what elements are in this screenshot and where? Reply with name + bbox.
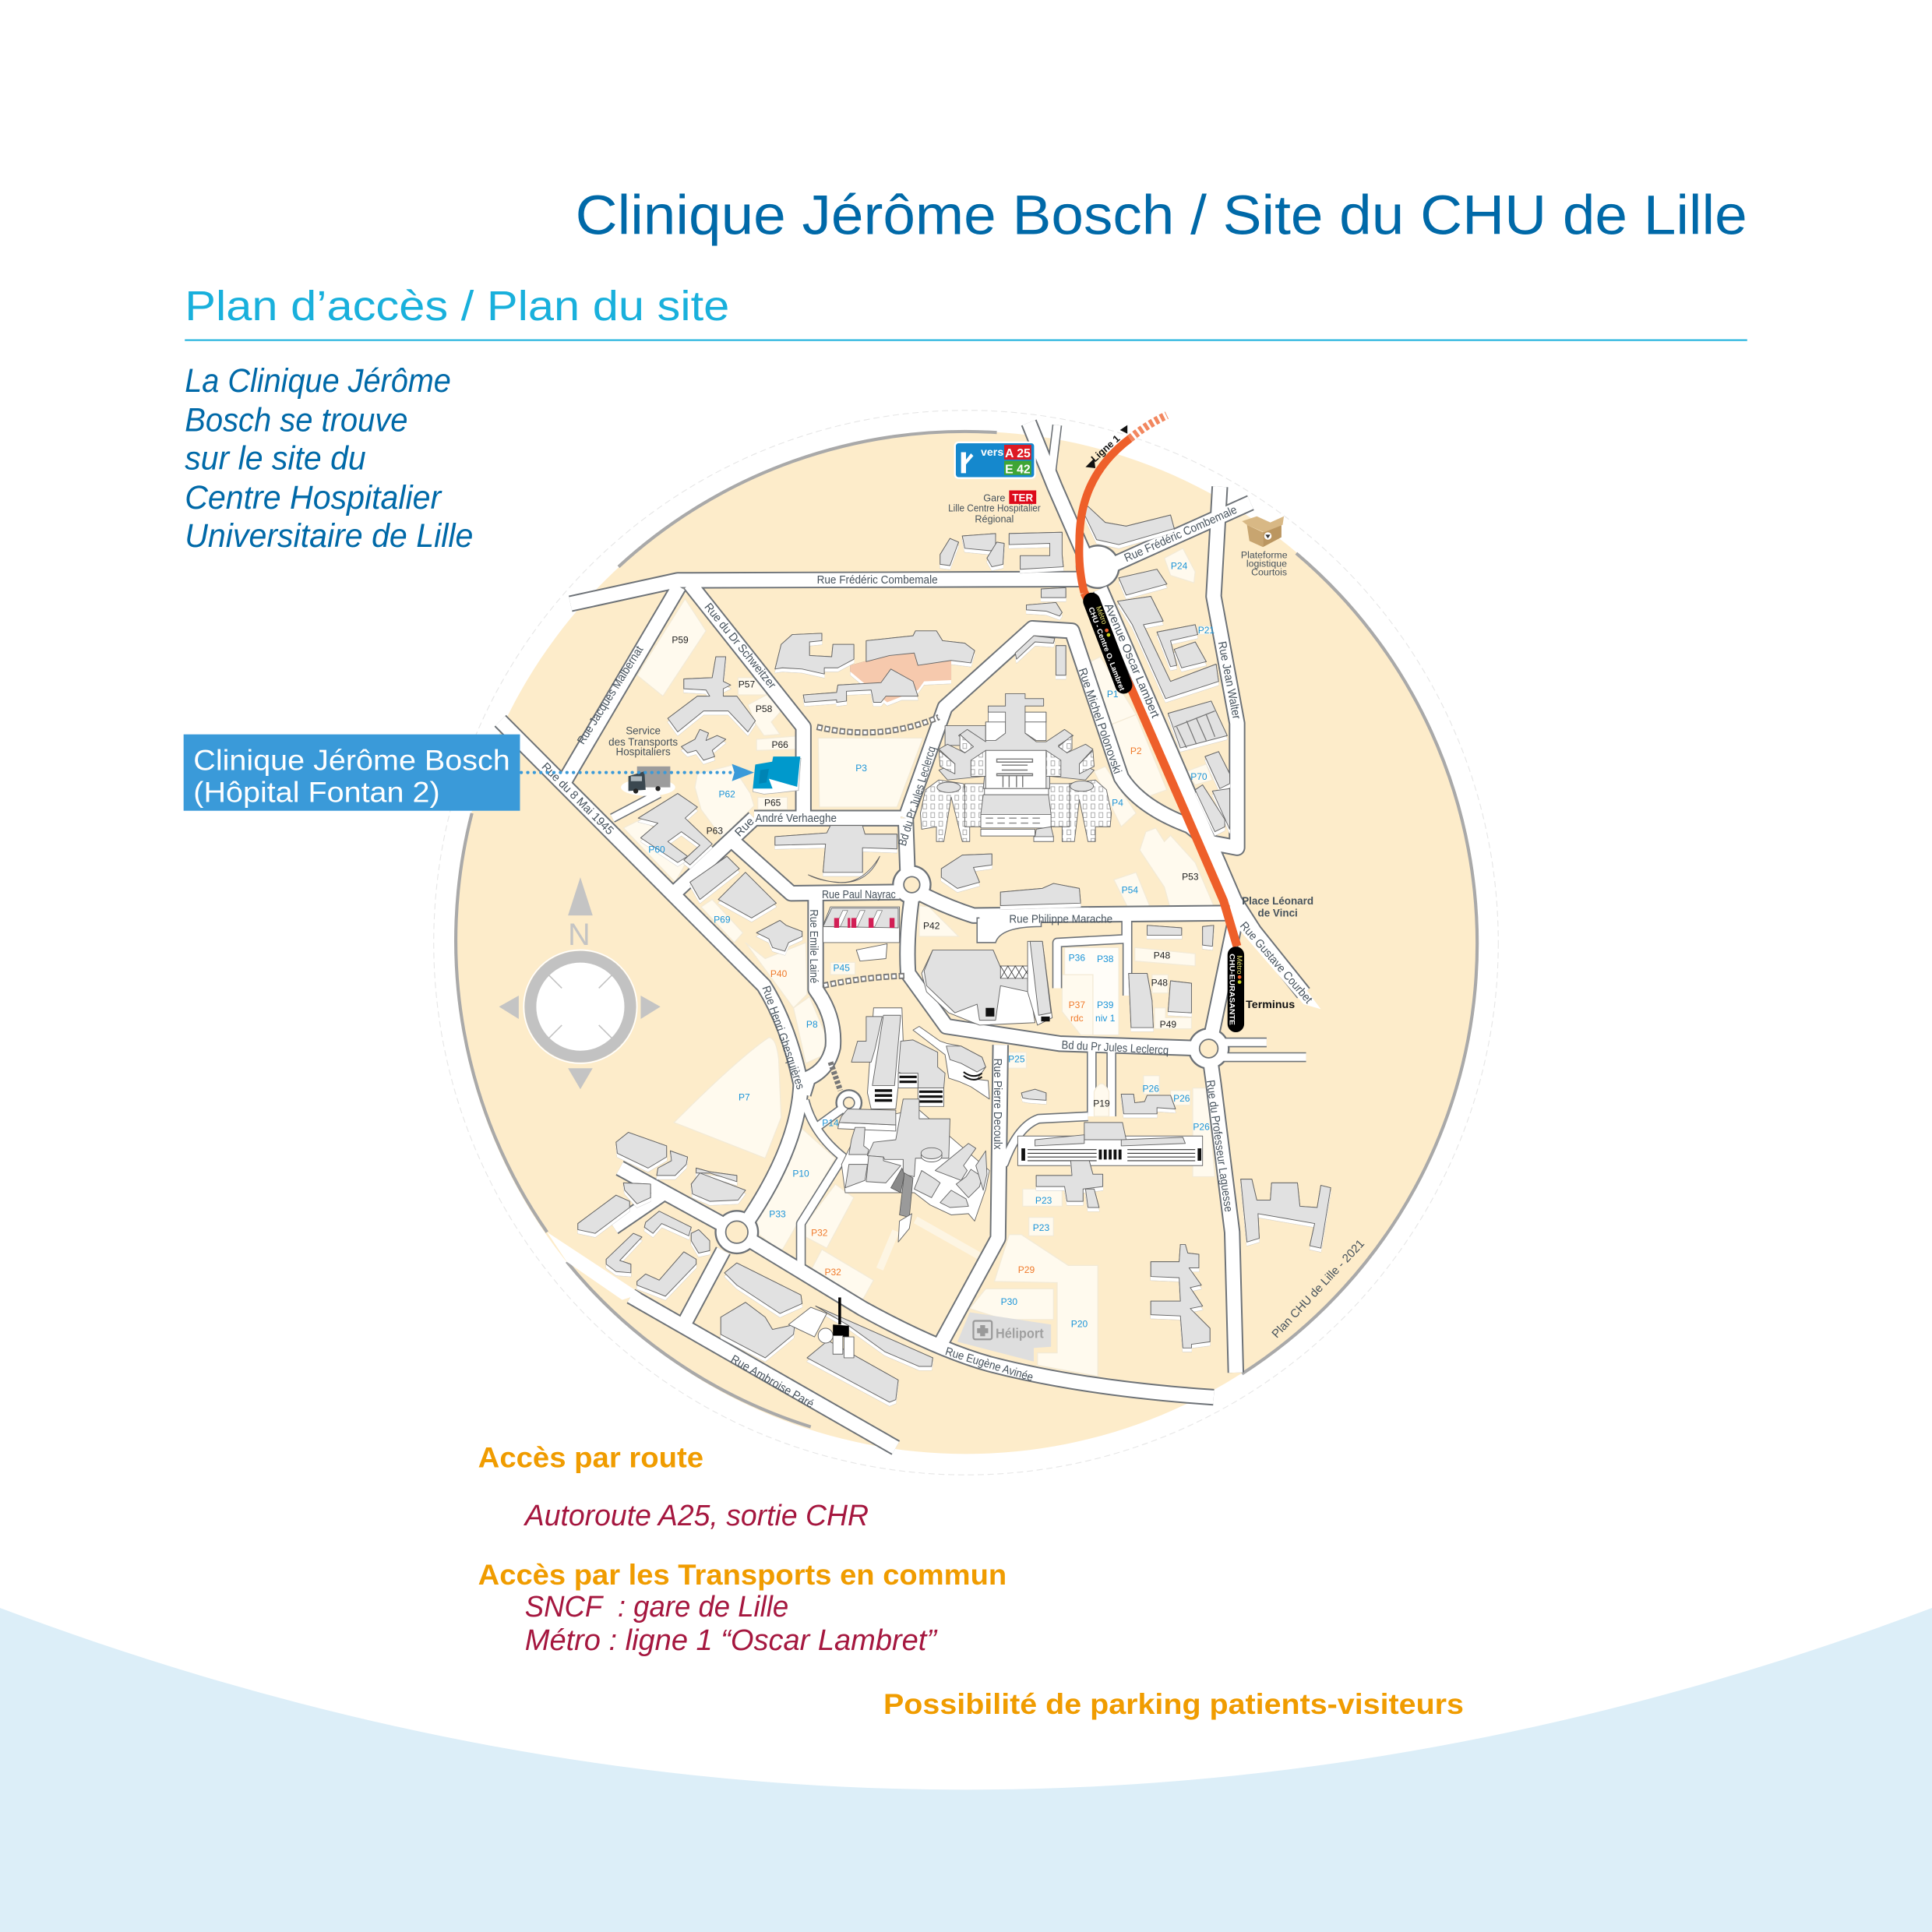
service label: Service: [626, 725, 661, 737]
parking labels: P29: [1018, 1264, 1035, 1275]
text block: parking: Possibilité de parking patients-visiteurs: [883, 1687, 1464, 1720]
parking labels: P10: [792, 1168, 809, 1179]
street: Rue André Verhaeghe: André Verhaeghe: [756, 812, 837, 825]
compass rose: N: [568, 918, 591, 952]
roads network: [500, 422, 1321, 1447]
street: Rue Frédéric Combemale: Rue Frédéric Combemale: [817, 573, 938, 587]
service label: [608, 725, 678, 758]
parking labels: P66: [771, 739, 788, 750]
parking labels: P1: [1107, 689, 1119, 700]
street: Rue Jean Walter: Rue Jean Walter: [1215, 640, 1243, 721]
parking labels: P30: [1001, 1296, 1017, 1307]
heliport: [957, 1312, 1051, 1362]
parking labels: P48: [1154, 950, 1170, 961]
parking labels: P26: [1193, 1121, 1210, 1132]
parking labels: P25: [1008, 1053, 1025, 1064]
street: Rue Frédéric Combemale east: Rue Frédéric Combemale: [1123, 503, 1239, 565]
parking labels: P58: [756, 703, 773, 714]
compass rose: [499, 877, 661, 1089]
background: bottom blue curve: [0, 1608, 1932, 1932]
credit: Plan CHU de Lille 2021: Plan CHU de Lille - 2021: [1269, 1237, 1367, 1341]
parking labels: P26: [1143, 1083, 1159, 1094]
service label: Hospitaliers: [616, 746, 671, 758]
arrow: dotted pointer to the clinic: [521, 764, 754, 781]
building: middle hospital block: [922, 941, 1052, 1025]
station label: Gare TER: [948, 490, 1041, 525]
service label: des Transports: [608, 736, 678, 748]
road sign: vers A25 E42: A 25: [1005, 447, 1031, 460]
metro station pill: CHU Eurasanté: CHU-EURASANTE: [1227, 954, 1236, 1025]
parking labels: niv 1: [1095, 1013, 1116, 1024]
street: Bd du Pr Jules Leclercq north: Bd du Pr Jules Leclercq: [896, 745, 939, 848]
subtitle: plan d'accès: Plan d’accès / Plan du site: [185, 283, 729, 330]
icon: cardboard box, Plateforme logistique: Courtois: [1251, 567, 1287, 578]
road sign: vers A25 E42: vers: [981, 446, 1003, 459]
parking labels: P42: [923, 921, 940, 932]
parking labels: P53: [1182, 871, 1199, 882]
station label: Gare TER: TER: [1012, 492, 1033, 504]
truck icon: Service des Transports: [621, 767, 675, 796]
stone footpaths: [817, 717, 939, 1091]
building: Paul Nayrac with red bars: [823, 907, 900, 961]
metro station pill: CHU Centre O. Lambret: Métro: [1094, 605, 1109, 626]
building: white tower with black mast: [788, 1297, 854, 1358]
metro label: Ligne 1: [1085, 425, 1127, 468]
road sign: vers A25 E42: [955, 442, 1035, 478]
parking labels: P37: [1069, 999, 1085, 1010]
street: Rue Emile Lainé: Rue Emile Lainé: [807, 909, 820, 983]
metro label: Ligne 1: Ligne 1: [1089, 433, 1122, 464]
metro station pill: CHU Eurasanté: Métro: [1235, 955, 1243, 975]
parking labels: P40: [770, 968, 788, 979]
parking labels: P32: [811, 1227, 828, 1238]
parking labels: P38: [1097, 954, 1114, 964]
parking labels: P69: [714, 915, 731, 925]
parking labels: [648, 561, 1215, 1329]
station label: Gare TER: Lille Centre Hospitalier: [948, 502, 1041, 513]
metro station pill: CHU Eurasanté: [1227, 954, 1243, 1025]
parking labels: P32: [824, 1267, 841, 1278]
parking labels: P39: [1097, 999, 1114, 1010]
parking lots: [623, 548, 1215, 1377]
parking labels: P2: [1130, 746, 1142, 756]
buildings: north east cluster: [940, 506, 1229, 832]
parking labels: P14: [822, 1118, 839, 1129]
street: Rue du Professeur Laguesse: Rue du Professeur Laguesse: [1204, 1079, 1235, 1213]
building: main hospital Huriez: [838, 1008, 989, 1242]
parking labels: P33: [769, 1209, 786, 1220]
street: Rue Ambroise Paré: Rue Ambroise Paré: [728, 1352, 816, 1411]
intro text block: La Clinique Jérôme: [185, 362, 451, 400]
text block: accès par transports en commun: SNCF : gare de Lille: [525, 1591, 788, 1624]
icon: cardboard box, Plateforme logistique: logistique: [1246, 559, 1287, 569]
intro text block: sur le site du: [185, 440, 366, 478]
map ground: [434, 411, 1498, 1475]
intro text block: Bosch se trouve: [185, 402, 408, 439]
buildings: annexes south: [1036, 1161, 1331, 1348]
parking labels: P70: [1190, 771, 1208, 782]
street: Rue Gustave Courbet: Rue Gustave Courbet: [1237, 919, 1315, 1007]
parking labels: P21: [1198, 625, 1215, 636]
parking labels: P62: [718, 788, 735, 799]
callout: Clinique Jérôme Bosch: [184, 735, 520, 811]
buildings: north west pink complex: [775, 631, 975, 703]
icon: cardboard box, Plateforme logistique: Plateforme: [1241, 549, 1288, 560]
parking labels: P65: [764, 797, 781, 808]
buildings: west blocks around Service des Transports: [638, 657, 897, 951]
station label: Gare TER: Régional: [975, 514, 1014, 525]
street: Bd du Pr Jules Leclercq south: Bd du Pr Jules Leclercq: [1061, 1038, 1169, 1057]
parking labels: P20: [1071, 1318, 1088, 1329]
street: Rue Pierre Decoulx: Rue Pierre Decoulx: [991, 1059, 1004, 1150]
street: Rue André Verhaeghe: [732, 812, 837, 840]
street: Rue Jacques Malbernat: Rue Jacques Malbernat: [575, 643, 647, 747]
title: Clinique Jérôme Bosch / Site du CHU de Lille: [576, 185, 1747, 247]
street: Rue Henri Ghesquières: Rue Henri Ghesquières: [760, 984, 807, 1091]
text block: accès par transports en commun: Accès par les Transports en commun: [478, 1558, 1007, 1591]
text block: accès par route: Autoroute A25, sortie CHR: [524, 1500, 869, 1532]
road sign: vers A25 E42: E 42: [1005, 463, 1031, 476]
parking labels: P23: [1033, 1222, 1049, 1233]
street: Rue du 8 Mai 1945: Rue du 8 Mai 1945: [539, 760, 616, 837]
parking labels: P60: [648, 844, 665, 855]
target building: Clinique Jérôme Bosch: [753, 756, 801, 794]
crescent building: [809, 856, 880, 883]
text block: accès par transports en commun: [478, 1558, 1007, 1657]
place label: Place Léonard de Vinci: [1242, 895, 1313, 919]
street: Rue André Verhaeghe: Rue: [732, 815, 757, 840]
building: central monobloc: [920, 693, 1112, 841]
street: Rue Philippe Marache: Rue Philippe Marache: [1009, 913, 1112, 926]
callout: Clinique Jérôme Bosch: Clinique Jérôme Bosch: [193, 744, 510, 777]
intro text block: Centre Hospitalier: [185, 479, 442, 516]
street: Rue Paul Nayrac: Rue Paul Nayrac: [822, 888, 896, 901]
heliport: Héliport: [996, 1326, 1044, 1341]
text block: accès par route: [478, 1441, 869, 1532]
parking labels: P59: [672, 635, 689, 646]
text block: accès par route: Accès par route: [478, 1441, 703, 1474]
panel: circular campus map: [434, 411, 1498, 1475]
parking P19 arch lot: [1094, 1084, 1109, 1116]
street: Rue du Dr Schweitzer: Rue du Dr Schweitzer: [702, 601, 778, 691]
parking labels: P48: [1151, 977, 1168, 988]
metro line 1: [1079, 415, 1237, 947]
parking labels: P54: [1122, 885, 1138, 896]
terminus label: Terminus: [1246, 999, 1295, 1011]
buildings: south west cluster: [578, 1133, 933, 1402]
parking labels: P45: [834, 962, 850, 973]
buildings: centre blocks: [941, 854, 1214, 1114]
parking labels: P23: [1035, 1195, 1052, 1206]
parking labels: P63: [707, 826, 723, 837]
parking labels: P3: [855, 763, 867, 774]
callout: Clinique Jérôme Bosch: (Hôpital Fontan 2): [193, 776, 440, 809]
place label: Place Léonard de Vinci: de Vinci: [1258, 908, 1298, 919]
place label: Place Léonard de Vinci: Place Léonard: [1242, 895, 1313, 907]
parking labels: P4: [1112, 797, 1123, 808]
text block: accès par transports en commun: Métro : ligne 1 “Oscar Lambret”: [525, 1624, 938, 1657]
parking labels: P57: [739, 679, 755, 690]
icon: cardboard box, Plateforme logistique: [1241, 516, 1288, 578]
street labels: [539, 503, 1367, 1411]
station label: Gare TER: Gare: [983, 493, 1005, 504]
street: Rue Eugène Avinée: Rue Eugène Avinée: [943, 1345, 1035, 1384]
parking labels: P24: [1171, 561, 1188, 572]
street: Rue Michel Polonovski: Rue Michel Polonovski: [1075, 666, 1124, 776]
parking labels: rdc: [1070, 1013, 1084, 1024]
parking labels: P26: [1173, 1093, 1190, 1104]
striped lot detail: [1174, 711, 1215, 748]
parking labels: P8: [806, 1019, 818, 1030]
parking labels: P36: [1069, 953, 1085, 964]
street: Avenue Oscar Lambert: Avenue Oscar Lambert: [1102, 601, 1162, 721]
parking labels: P49: [1160, 1019, 1176, 1030]
metro station pill: CHU Centre O. Lambret: CHU - Centre O. Lambret: [1086, 606, 1126, 693]
parking labels: P7: [739, 1091, 750, 1102]
intro text block: Universitaire de Lille: [185, 517, 473, 555]
buildings: long hospital and annexes: [1017, 1123, 1203, 1165]
intro text block: [185, 362, 473, 555]
parking labels: P19: [1093, 1098, 1110, 1109]
